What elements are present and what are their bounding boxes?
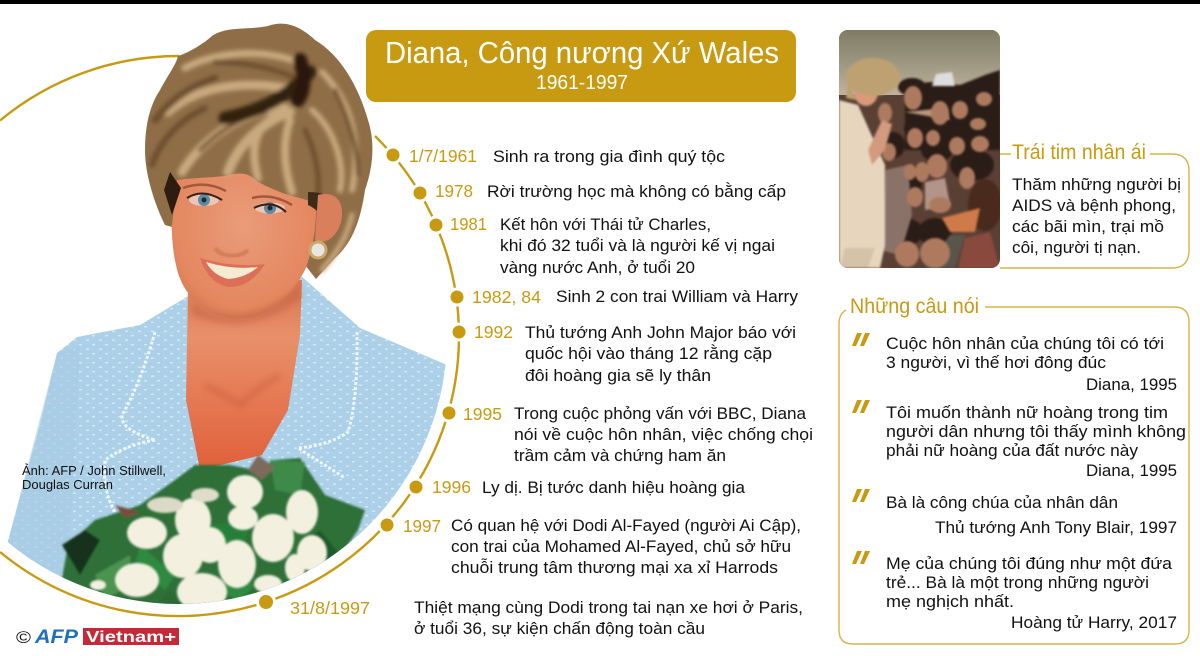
copyright and logos [16, 627, 179, 648]
quote mark [852, 400, 870, 413]
photo credit: Ảnh: AFP / John Stillwell, [22, 463, 166, 478]
event 1995: nói về cuộc hôn nhân, việc chống chọi [514, 425, 813, 444]
event 1981: Kết hôn với Thái tử Charles, [500, 215, 711, 234]
timeline dots [258, 147, 467, 610]
event 1995: 1995 [463, 404, 502, 424]
body text [1012, 175, 1181, 257]
eyes [183, 185, 292, 214]
event 1995: Trong cuộc phỏng vấn với BBC, Diana [514, 404, 807, 423]
nose [215, 248, 248, 256]
event 1982, 84: 1982, 84 [472, 287, 541, 307]
event 1978: 1978 [435, 181, 473, 201]
quote 1: Diana, 1995 [1086, 375, 1177, 394]
quote 2: phải nữ hoàng của đất nước này [886, 441, 1138, 460]
event 1982, 84 [472, 287, 799, 307]
quote 4: mẹ nghịch nhất. [886, 592, 1014, 611]
quote 4 [852, 551, 1177, 632]
event 1996: Ly dị. Bị tước danh hiệu hoàng gia [482, 478, 746, 497]
event 31/8/1997: 31/8/1997 [290, 598, 370, 618]
event 31/8/1997: ở tuổi 36, sự kiện chấn động toàn cầu [414, 619, 705, 638]
event 1997: con trai của Mohamed Al-Fayed, chủ sở hữu [451, 537, 791, 556]
Diana in cream suit [839, 58, 900, 268]
white roses [90, 475, 327, 611]
event 1981 [450, 214, 775, 277]
event 1978: Rời trường học mà không có bằng cấp [487, 182, 786, 201]
smile [200, 258, 265, 287]
body text: côi, người tị nạn. [1012, 238, 1141, 257]
face [170, 150, 316, 318]
copyright sign: © [16, 628, 32, 647]
heading: Những câu nói [850, 295, 979, 318]
neck and chest [186, 280, 302, 470]
panel: quotes [839, 295, 1189, 644]
ear and earring [308, 194, 342, 260]
hair back [145, 24, 372, 279]
quote 2: người dân nhưng tôi thấy mình không [886, 422, 1186, 441]
quote mark [852, 489, 870, 502]
crowd clothes [880, 72, 1000, 268]
charity photo [839, 30, 1002, 268]
quote 4: Mẹ của chúng tôi đúng như một đứa [886, 554, 1173, 573]
event 1961: 1/7/1961 [409, 146, 477, 166]
panel border [1000, 154, 1189, 268]
event 1997: 1997 [403, 516, 441, 536]
quote 3 [852, 489, 1177, 537]
panel border [839, 307, 1189, 644]
jacket [8, 276, 446, 604]
portrait photo of Diana [0, 24, 447, 640]
event 1997: Có quan hệ với Dodi Al-Fayed (người Ai Cập), [451, 516, 801, 535]
bouquet leaves [60, 454, 366, 604]
heading: Trái tim nhân ái [1012, 141, 1146, 164]
event 1996: 1996 [432, 477, 471, 497]
top black bar [0, 0, 1200, 4]
neck shadow [192, 285, 302, 324]
quote 1: 3 người, vì thế hơi đông đúc [886, 353, 1107, 372]
event 1995 [463, 404, 813, 465]
event 1981: khi đó 32 tuổi và là người kế vị ngai [500, 236, 775, 255]
title text: Diana, Công nương Xứ Wales [385, 35, 779, 70]
quote 2: Tôi muốn thành nữ hoàng trong tim [886, 403, 1168, 422]
photo credit: Douglas Curran [22, 477, 113, 492]
event 1995: trầm cảm và chứng ham ăn [514, 446, 726, 465]
jacket collar trim [104, 332, 357, 512]
quote 1: Cuộc hôn nhân của chúng tôi có tới [886, 334, 1164, 353]
panel: charity [1000, 141, 1189, 268]
event 1992: Thủ tướng Anh John Major báo với [525, 323, 796, 342]
event 1992: 1992 [474, 322, 513, 342]
hair fringe and highlights [152, 53, 358, 270]
quote mark [852, 551, 870, 564]
AFP logo: AFP [34, 627, 78, 648]
quote 1 [852, 333, 1177, 394]
quote mark [852, 333, 870, 346]
event 1992: quốc hội vào tháng 12 rằng cặp [525, 344, 772, 363]
event 1961 [409, 146, 726, 166]
body text: AIDS và bệnh phong, [1012, 196, 1176, 215]
quote 2: Diana, 1995 [1086, 461, 1177, 480]
crowd hair [881, 70, 1002, 246]
event 1982, 84: Sinh 2 con trai William và Harry [556, 287, 799, 306]
event 31/8/1997: Thiệt mạng cùng Dodi trong tai nạn xe hơi ở Paris, [414, 598, 803, 617]
event 1997: chuỗi trung tâm thương mại xa xỉ Harrods [451, 558, 778, 577]
timeline arc [0, 56, 459, 616]
event 1961: Sinh ra trong gia đình quý tộc [493, 147, 726, 166]
hillside background [839, 30, 1000, 95]
event 1997 [403, 516, 801, 577]
body text: Thăm những người bị [1012, 175, 1181, 194]
quote 3: Bà là công chúa của nhân dân [886, 493, 1118, 512]
quote 4: trẻ... Bà là một trong những người [886, 573, 1149, 592]
quote 4: Hoàng tử Harry, 2017 [1011, 613, 1177, 632]
event 1981: vàng nước Anh, ở tuổi 20 [500, 258, 695, 277]
photo credit [22, 463, 166, 492]
event 1981: 1981 [450, 214, 487, 234]
crowd faces [878, 86, 992, 268]
body text: các bãi mìn, trại mồ [1012, 217, 1164, 236]
Vietnam+ logo: Vietnam+ [86, 629, 176, 646]
title box [366, 30, 796, 102]
quote 3: Thủ tướng Anh Tony Blair, 1997 [935, 518, 1177, 537]
event 1992 [474, 322, 796, 385]
event 31/8/1997 [290, 598, 803, 638]
years: 1961-1997 [536, 72, 628, 94]
event 1992: đôi hoàng gia sẽ ly thân [525, 366, 711, 385]
quote 2 [852, 400, 1186, 480]
